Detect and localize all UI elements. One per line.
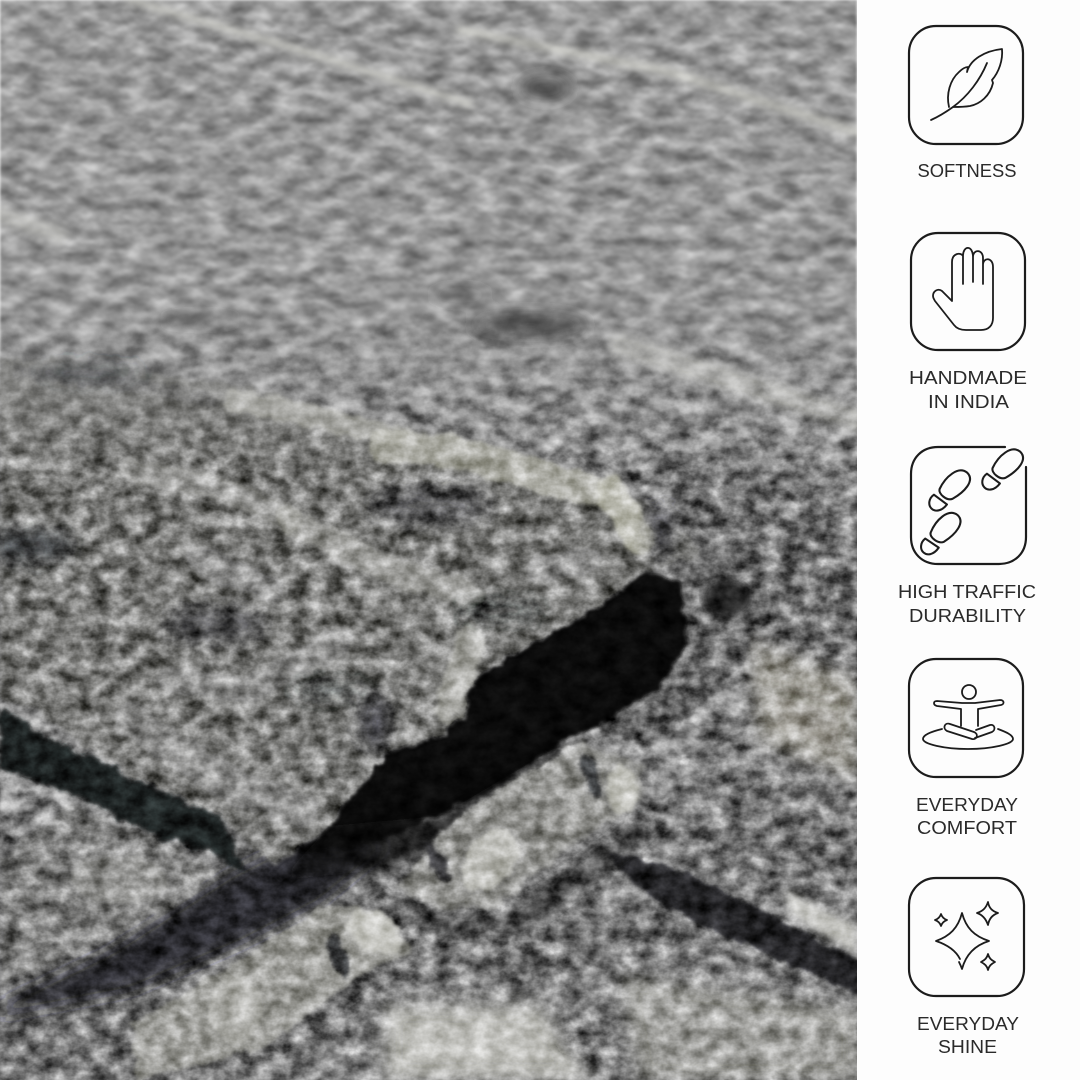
shadows between the lower folds	[0, 812, 660, 1060]
label: everyday shine: EVERYDAY	[917, 1014, 1019, 1034]
label: everyday comfort: COMFORT	[917, 818, 1017, 838]
label: softness: SOFTNESS	[918, 161, 1016, 181]
fine wool texture overlay	[0, 316, 857, 1080]
dark stripe lower left	[0, 708, 246, 873]
feature: everyday comfort	[909, 659, 1023, 838]
icon: seated meditation figure	[909, 659, 1023, 777]
label: handmade in India: HANDMADE	[909, 368, 1027, 388]
dark hollow under the fold	[300, 571, 687, 856]
feature: handmade in India	[909, 233, 1027, 412]
rope of yarn left	[0, 805, 220, 986]
folded corner of the rug	[0, 358, 700, 866]
dark stripe lower right	[604, 850, 859, 994]
icon: hand	[911, 233, 1025, 350]
icon: feather	[909, 26, 1023, 144]
icon: sparkles	[909, 878, 1024, 996]
feature: high traffic durability	[898, 444, 1036, 626]
label: everyday comfort: EVERYDAY	[916, 795, 1018, 815]
soft shadow at the hollow's lower edge	[280, 745, 590, 880]
fold underside around the hollow	[600, 548, 753, 740]
rug surface in the distance	[0, 0, 857, 1080]
photo: grey wool rug with folded corner	[0, 0, 859, 1080]
label: high traffic durability: HIGH TRAFFIC	[898, 582, 1036, 602]
label: everyday shine: SHINE	[938, 1037, 997, 1057]
rope of yarn right	[396, 741, 643, 911]
icon: footprints	[911, 444, 1027, 564]
label: handmade in India: IN INDIA	[928, 392, 1009, 412]
dark patch at fold tip	[704, 579, 752, 617]
label: high traffic durability: DURABILITY	[909, 606, 1026, 626]
foreground rug tones	[0, 440, 857, 1080]
feature: everyday shine	[909, 878, 1024, 1057]
feature: softness	[909, 26, 1023, 181]
rope of yarn centre	[132, 900, 412, 1080]
